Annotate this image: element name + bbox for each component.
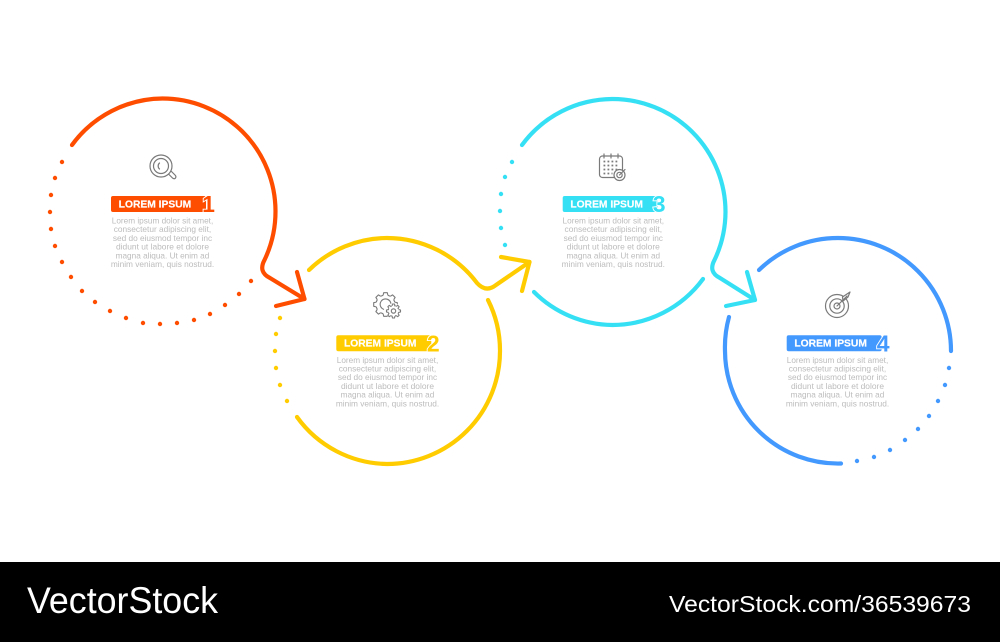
step 4 body text: Lorem ipsum dolor sit amet, bbox=[787, 356, 888, 365]
step 3 dotted arc bbox=[498, 160, 514, 247]
step 4 body text bbox=[786, 356, 889, 408]
step 1 body text: minim veniam, quis nostrud. bbox=[111, 260, 214, 269]
step 1 label badge: 1 bbox=[202, 191, 215, 217]
step 3 ring with arrow bbox=[522, 99, 755, 325]
step 2 body text: didunt ut labore et dolore bbox=[341, 382, 434, 391]
step 3 body text: magna aliqua. Ut enim ad bbox=[566, 251, 661, 260]
icon: calendar with target bbox=[600, 154, 625, 180]
step 3 body text: consectetur adipiscing elit, bbox=[565, 225, 662, 234]
step 1 body text bbox=[111, 216, 214, 269]
step 4 body text: didunt ut labore et dolore bbox=[791, 382, 884, 391]
step 4 ring bbox=[725, 238, 951, 464]
step 2 label badge: LOREM IPSUM bbox=[344, 339, 416, 350]
footer bar bbox=[0, 562, 1000, 642]
step 1 panel bbox=[48, 98, 305, 326]
step 2 body text: Lorem ipsum dolor sit amet, bbox=[337, 356, 438, 365]
step 2 body text: sed do eiusmod tempor inc bbox=[338, 373, 437, 382]
step 1 body text: consectetur adipiscing elit, bbox=[114, 225, 211, 234]
step 1 body text: didunt ut labore et dolore bbox=[116, 243, 209, 252]
footer brand: VectorStock bbox=[27, 580, 218, 621]
step 2 label badge bbox=[336, 330, 440, 356]
step 3 panel bbox=[498, 99, 755, 325]
step 3 label badge bbox=[563, 191, 666, 217]
step 4 label badge: LOREM IPSUM bbox=[794, 339, 867, 350]
step 1 label badge bbox=[111, 191, 215, 217]
icon: target with arrow bbox=[826, 292, 850, 318]
step 2 body text: consectetur adipiscing elit, bbox=[339, 364, 436, 374]
step 3 body text: didunt ut labore et dolore bbox=[567, 243, 660, 252]
step 4 label badge: 4 bbox=[877, 330, 890, 356]
step 1 ring with arrow bbox=[72, 98, 304, 306]
step 2 body text: minim veniam, quis nostrud. bbox=[336, 399, 439, 408]
step 2 body text bbox=[336, 356, 439, 408]
step 3 body text: minim veniam, quis nostrud. bbox=[562, 260, 665, 269]
step 4 panel bbox=[725, 238, 951, 464]
step 4 body text: magna aliqua. Ut enim ad bbox=[791, 391, 885, 400]
step 2 ring with arrow bbox=[297, 238, 530, 464]
step 1 body text: sed do eiusmod tempor inc bbox=[113, 234, 212, 243]
step 3 label badge: 3 bbox=[653, 191, 666, 217]
step 2 body text: magna aliqua. Ut enim ad bbox=[341, 391, 435, 400]
icon: magnifier bbox=[150, 155, 176, 179]
step 2 dotted arc bbox=[273, 316, 289, 403]
step 4 body text: consectetur adipiscing elit, bbox=[789, 364, 886, 374]
step 3 body text: sed do eiusmod tempor inc bbox=[564, 234, 663, 243]
step 1 dotted arc bbox=[48, 160, 253, 326]
step 3 label badge: LOREM IPSUM bbox=[570, 199, 643, 210]
step 3 body text bbox=[562, 216, 665, 269]
step 2 label badge: 2 bbox=[427, 330, 440, 356]
footer url: VectorStock.com/36539673 bbox=[669, 591, 971, 617]
step 2 panel bbox=[273, 238, 530, 464]
step 1 body text: Lorem ipsum dolor sit amet, bbox=[112, 216, 213, 226]
step 4 label badge bbox=[787, 330, 890, 356]
step 3 body text: Lorem ipsum dolor sit amet, bbox=[563, 216, 664, 226]
step 1 label badge: LOREM IPSUM bbox=[119, 199, 191, 210]
step 4 body text: minim veniam, quis nostrud. bbox=[786, 399, 889, 408]
step 1 body text: magna aliqua. Ut enim ad bbox=[116, 251, 210, 260]
step 4 body text: sed do eiusmod tempor inc bbox=[788, 373, 887, 382]
step 4 dotted arc bbox=[855, 366, 951, 463]
icon: gears bbox=[374, 293, 401, 319]
